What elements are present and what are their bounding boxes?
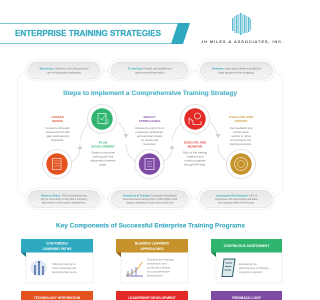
step 4: execute and monitor (180, 104, 210, 166)
step 5: evaluate and iterate: metrics to refine (231, 134, 251, 138)
card: blended learning approaches: APPROACHES (140, 247, 164, 251)
pill: investment in training: margin compared to those who spend less. (126, 202, 174, 204)
pill: seminars: Seminars: Information-dense and ideal for (212, 66, 261, 70)
step 2: plan development: training plan that (93, 154, 114, 158)
pill: workshops: can be logistically challenging. (47, 70, 82, 74)
step 5: evaluate and iterate: and enhance the (231, 138, 252, 142)
heading: key components: Key Components of Successful Enterprise Training Programs (56, 222, 245, 230)
pill: retention rates: Retention Rates: 70% of employees say (41, 194, 88, 198)
step 5: evaluate and iterate: training programs. (230, 142, 252, 146)
card: customized learning paths (21, 239, 93, 283)
pill: retention rates (26, 188, 102, 210)
label: EVALUATE AND (229, 115, 254, 119)
step 1: assess needs: gaps and learning (46, 134, 69, 138)
pill: learning and development: the company within the first year. (218, 202, 255, 204)
card: blended learning approaches: BLENDED LEARNING (135, 242, 169, 246)
icon: growth chart (126, 262, 143, 276)
pill: e-learning: lacks personal interaction. (135, 70, 165, 74)
logo (201, 13, 283, 44)
step 2: plan development: DEVELOPMENT (91, 144, 115, 148)
card: feedback loop: FEEDBACK LOOP (232, 296, 262, 300)
step 5: evaluate and iterate: performance (233, 130, 249, 134)
heading: steps: Steps to Implement a Comprehensive Training Strategy (63, 90, 237, 97)
pill: learning and development (198, 188, 275, 210)
pill connectors (102, 70, 198, 199)
step 2: plan development: goals. (99, 162, 107, 166)
card: continuous assessment: programs regularly (239, 270, 263, 274)
label: PLAN (99, 140, 108, 144)
card: customized learning paths: CUSTOMIZED (46, 242, 68, 246)
step 1: assess needs: NEEDS (52, 119, 63, 123)
card: customized learning paths: departmental needs (52, 270, 77, 274)
step 3: select approaches (135, 115, 164, 178)
card: customized learning paths: meet individual and (52, 266, 77, 270)
card: blended learning approaches (116, 239, 188, 283)
step 1: assess needs: assessment of skill (46, 130, 70, 134)
icon: gears (180, 104, 210, 134)
pill: retention rates: they're more likely to stay with a company (41, 198, 88, 201)
icon: building monogram (233, 13, 250, 35)
pill: learning and development: employees with poor training will leave (215, 198, 258, 201)
card: technology integration (21, 291, 93, 300)
step 4: execute and monitor: MONITOR (188, 144, 203, 148)
pill: workshops (26, 60, 102, 81)
card: technology integration: TECHNOLOGY INTEGRATION (34, 296, 81, 300)
label: ASSESS (51, 115, 64, 119)
pill: investment in training: Investment in Training: Companies investing in (123, 194, 178, 198)
pill: e-learning (108, 60, 190, 81)
step 3: select approaches: e-learning, workshops, (135, 130, 164, 134)
step 2: plan development (88, 104, 116, 166)
step 4: execute and monitor: through KPI data. (184, 162, 206, 166)
card: blended learning approaches: development (147, 274, 163, 278)
step 5: evaluate and iterate: ITERATE (234, 119, 248, 123)
pill: retention rates: that invests in their career development. (42, 202, 86, 204)
icon: cycle (226, 150, 256, 178)
step 3: select approaches: on needs and (141, 138, 158, 142)
step 4: execute and monitor: initiatives and (187, 154, 204, 158)
step 1: assess needs: objectives. (51, 138, 64, 142)
step 2: plan development: aligns with business (91, 158, 116, 162)
card: blended learning approaches: Combining e-learning, (147, 258, 175, 262)
card: continuous assessment: Evaluating the (239, 262, 257, 266)
card: continuous assessment: effectiveness of training (239, 266, 269, 270)
pill: workshops: Workshops: Hands-on and interactive but (40, 66, 89, 70)
pill: investment in training: comprehensive training enjoy a 24% higher profit (123, 198, 177, 201)
card: blended learning approaches: workshops, and (147, 262, 167, 266)
label: EXECUTE AND (184, 140, 207, 144)
company name: JH MILES & ASSOCIATES, INC. (201, 39, 283, 44)
step 4: execute and monitor: monitor progress (184, 158, 206, 162)
step 3: select approaches: APPROACHES (139, 119, 160, 123)
description: Roll out the training (183, 150, 207, 154)
description: Create a structured (91, 150, 115, 154)
card: customized learning paths: LEARNING PATHS (43, 247, 72, 251)
card: blended learning approaches: on-the-job training (147, 266, 170, 270)
card: leadership development (116, 291, 188, 300)
icon: plan (88, 104, 116, 134)
card: continuous assessment: CONTINUOUS ASSESSMENT (224, 244, 269, 248)
description: Choose the right mix of (135, 126, 164, 130)
arrows between steps (71, 122, 228, 162)
label: SELECT (143, 115, 156, 119)
title: ENTERPRISE TRAINING STRATEGIES (15, 29, 162, 38)
title banner (0, 23, 190, 44)
step 1: assess needs (42, 115, 72, 178)
panel: steps (18, 72, 283, 197)
step 3: select approaches: and seminars based (137, 134, 163, 138)
step 5: evaluate and iterate (226, 115, 256, 178)
pill: investment in training (108, 188, 190, 210)
icon: people (30, 260, 46, 276)
pill: learning and development: Learning and Development: 40% of (216, 194, 258, 198)
card: customized learning paths: Tailoring training to (52, 262, 76, 266)
pill: e-learning: E-Learning: Flexible and scalable but (128, 66, 172, 70)
step 3: select approaches: resources. (143, 142, 156, 146)
pill: seminars (198, 60, 275, 81)
icon: clipboard (222, 259, 235, 276)
description: Conduct a thorough (45, 126, 70, 130)
card: blended learning approaches: for comprehensive (147, 270, 170, 274)
description: Use feedback and (230, 126, 253, 130)
card: feedback loop (211, 291, 282, 300)
card: leadership development: LEADERSHIP DEVELOPMENT (128, 296, 176, 300)
card: continuous assessment (211, 239, 282, 283)
pill: seminars: large groups but less engaging. (218, 70, 255, 74)
icon: document (135, 150, 164, 178)
icon: checklist (42, 150, 72, 178)
